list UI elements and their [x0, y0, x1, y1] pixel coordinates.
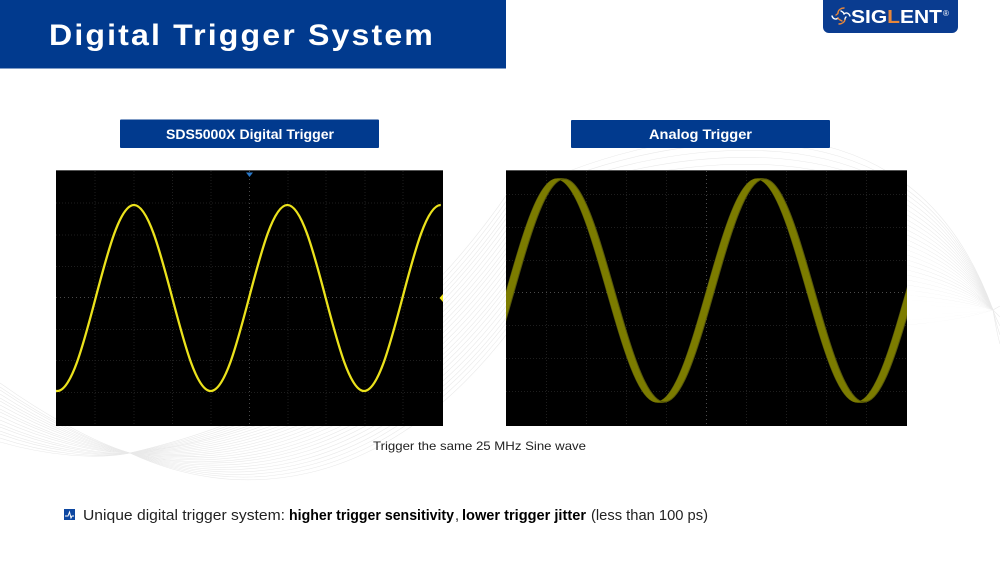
bullet text: higher trigger sensitivity — [289, 508, 454, 524]
caption: Trigger the same 25 MHz Sine wave — [373, 439, 586, 453]
bullet text: , — [455, 508, 459, 524]
panel: analog trigger oscilloscope screen — [506, 170, 907, 426]
panel: digital trigger oscilloscope screen — [19, 170, 443, 426]
yellow sine wave — [19, 205, 441, 391]
bullet text: Unique digital trigger system: — [83, 508, 285, 524]
logo: SIGLENT — [823, 0, 958, 33]
bullet text — [83, 508, 708, 524]
heading: SDS5000X Digital Trigger: SDS5000X Digital Trigger — [166, 126, 335, 142]
title: Digital Trigger System — [49, 19, 435, 52]
olive jittered sine band — [506, 178, 907, 403]
logo text: SIGLENT — [851, 6, 943, 27]
icon: swirl — [832, 8, 850, 24]
heading: SDS5000X Digital Trigger — [120, 120, 379, 148]
title banner — [0, 0, 506, 68]
heading: Analog Trigger — [571, 120, 830, 148]
background wave ribbon: upper right — [506, 137, 1000, 344]
heading: Analog Trigger: Analog Trigger — [649, 126, 753, 142]
trigger position marker — [246, 172, 253, 177]
trigger level marker — [440, 294, 443, 302]
bullet text: (less than 100 ps) — [591, 508, 708, 524]
bullet point text block — [64, 508, 708, 524]
bullet text: lower trigger jitter — [462, 508, 586, 524]
background wave ribbon: lower left — [0, 190, 510, 480]
icon: blue pulse bullet — [64, 509, 75, 520]
logo: SIGLENT: ® — [943, 9, 949, 18]
